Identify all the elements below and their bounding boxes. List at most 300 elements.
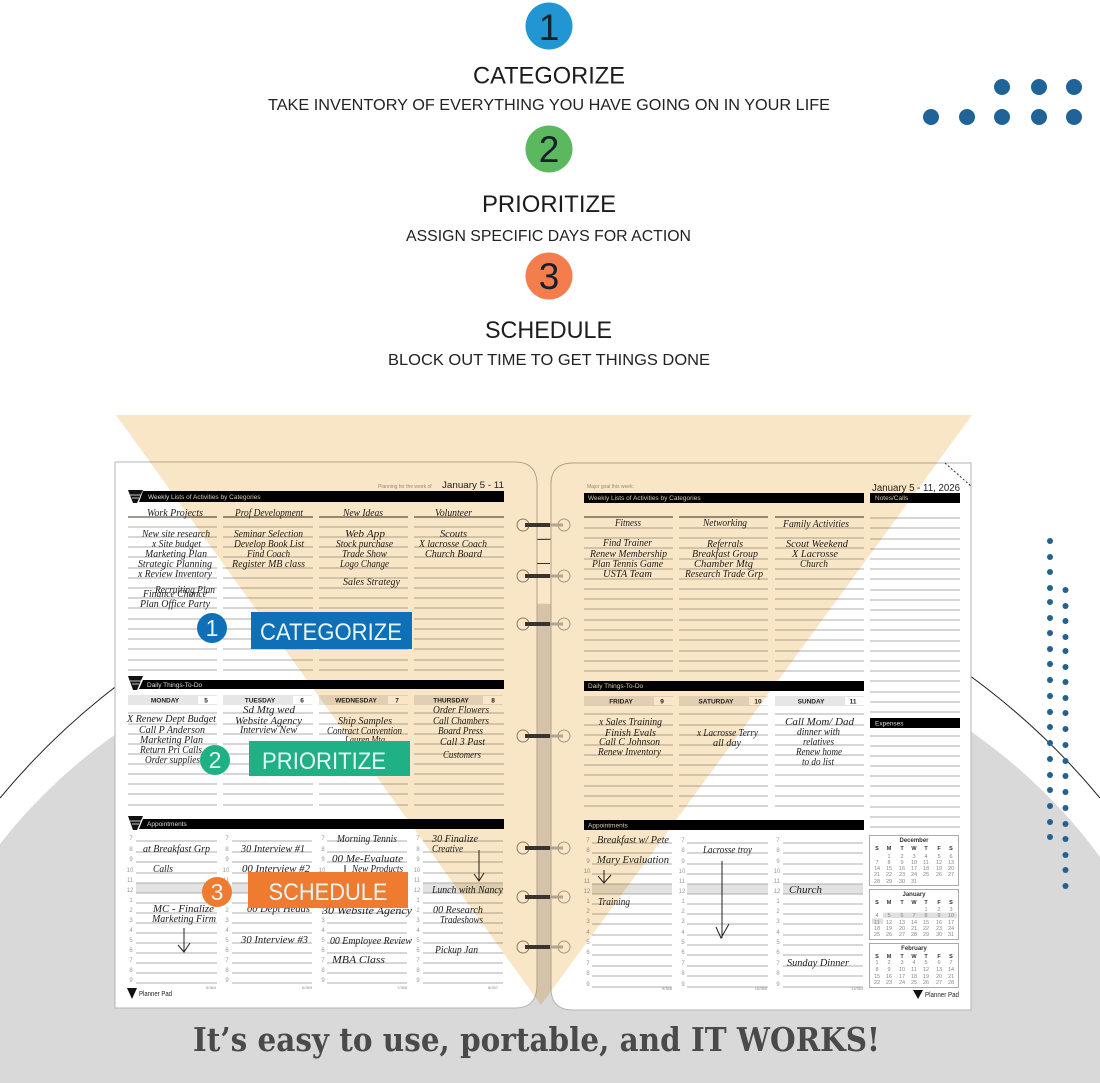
handwritten appointments right: Mary Evaluation <box>596 855 669 866</box>
calendar: december <box>870 836 958 886</box>
appointment hour labels right: 8 <box>776 971 780 977</box>
decorative dots top right <box>923 79 1082 125</box>
calendar: december: 26 <box>936 872 942 878</box>
calendar: december: 23 <box>899 872 905 878</box>
logo: planner pad right: Planner Pad <box>925 992 959 999</box>
calendar: december: 14 <box>874 866 880 872</box>
calendar: december: 16 <box>899 866 905 872</box>
appointment hour labels left: 8 <box>129 847 133 853</box>
label: prioritize: PRIORITIZE <box>262 748 386 775</box>
logo: planner pad left: Planner Pad <box>139 991 172 998</box>
appointment hour labels left: 8 <box>129 968 133 974</box>
appointment hour labels right: 12 <box>679 889 686 895</box>
left header: planning week <box>378 480 504 491</box>
handwritten weekly categories left: Trade Show <box>342 549 387 560</box>
handwritten weekly categories left: Scouts <box>440 529 467 540</box>
handwritten appointments left: 30 Finalize <box>431 834 478 845</box>
calendar: january: 8 <box>924 913 928 919</box>
appointment hour labels right: 8 <box>681 971 685 977</box>
handwritten weekly categories right: USTA Team <box>603 569 652 580</box>
calendar: december: 25 <box>923 872 929 878</box>
daily ruled lines left <box>128 713 504 805</box>
appointment hour labels right: 7 <box>681 838 685 844</box>
section bar: appointments: Appointments <box>147 821 187 828</box>
handwritten weekly categories left: Volunteer <box>435 508 473 519</box>
handwritten appointments left: MBA Class <box>331 955 385 966</box>
appointment hour labels left: 3 <box>321 918 325 924</box>
calendar: january: 1 <box>924 907 928 913</box>
handwritten daily tasks right: Renew home <box>795 747 842 758</box>
calendar: february: 7 <box>949 960 953 966</box>
handwritten appointments left: 30 Interview #3 <box>240 935 308 946</box>
handwritten weekly categories right: Referrals <box>706 539 743 550</box>
right header: major goal: Major goal this week: <box>587 484 634 490</box>
calendar: january <box>870 890 958 940</box>
day headers right: FRIDAY <box>609 698 633 706</box>
icon: number 3 badge: 3 <box>539 256 559 297</box>
calendar: december: 31 <box>911 879 917 885</box>
appointment hour labels right: 3 <box>586 919 590 925</box>
appointment hour labels right: 1 <box>776 899 780 905</box>
appointment hour labels left: 3 <box>129 918 133 924</box>
appointment hour labels left: 5 <box>416 938 420 944</box>
handwritten weekly categories left: Finance Chance <box>142 589 207 600</box>
handwritten appointments right: Breakfast w/ Pete <box>597 835 669 846</box>
calendar: december: 8 <box>887 860 891 866</box>
calendar: january: 26 <box>886 932 892 938</box>
appointment hour labels right: 3 <box>681 919 685 925</box>
calendar: february: 9 <box>887 967 891 973</box>
calendar: january: T <box>924 900 928 906</box>
calendar: january: 31 <box>948 932 954 938</box>
calendar: february <box>870 944 958 988</box>
calendar: december: December <box>899 838 929 844</box>
appointment hour labels right: 8 <box>586 848 590 854</box>
appointment hour labels right: 5 <box>776 940 780 946</box>
calendar: february: S <box>949 954 953 960</box>
handwritten weekly categories left: Develop Book List <box>233 539 305 550</box>
appointment hour labels left: 1 <box>321 898 325 904</box>
calendar: february: 12 <box>923 967 929 973</box>
calendar: december: S <box>875 846 879 852</box>
handwritten appointments left: Lunch with Nancy <box>431 885 503 896</box>
calendar: december: M <box>887 846 892 852</box>
handwritten appointments left: 30 Interview #1 <box>240 844 305 855</box>
calendar: december: 22 <box>886 872 892 878</box>
appointment lines left <box>136 841 503 983</box>
step 1: categorize <box>268 2 830 114</box>
section bar: weekly lists right <box>584 493 864 503</box>
appointment hour labels left: 9 <box>225 978 229 984</box>
calendar: february: T <box>924 954 928 960</box>
handwritten daily tasks right: Renew Inventory <box>597 747 661 758</box>
calendar: january: 15 <box>923 920 929 926</box>
calendar: february: 22 <box>874 980 880 986</box>
section bar: expenses: Expenses <box>875 720 904 728</box>
calendar: february: 20 <box>936 974 942 980</box>
callout: prioritize <box>200 741 410 776</box>
appointment hour labels right: 7 <box>681 961 685 967</box>
appointment hour labels right: 9 <box>681 859 685 865</box>
appointment hour labels left: 3 <box>416 918 420 924</box>
calendar: december: 15 <box>886 866 892 872</box>
binder rings <box>517 519 570 953</box>
handwritten weekly categories right: Family Activities <box>782 519 849 530</box>
appointment hour labels left: 5 <box>129 938 133 944</box>
appointment hour labels left: 7 <box>416 836 420 842</box>
day headers left: 8 <box>491 698 495 704</box>
appointment hour labels left: 7 <box>416 958 420 964</box>
calendar: january: S <box>949 900 953 906</box>
calendar: february: S <box>875 954 879 960</box>
calendar: february: February <box>901 946 927 952</box>
day headers right: SATURDAY <box>698 698 734 706</box>
calendar: december: 13 <box>948 860 954 866</box>
handwritten daily tasks left <box>126 705 489 766</box>
calendar: february: 6 <box>937 960 941 966</box>
page numbers left: 5/360 <box>206 985 217 990</box>
calendar: february: M <box>887 954 892 960</box>
appointment hour labels right: 4 <box>776 930 780 936</box>
appointment hour labels right: 8 <box>776 848 780 854</box>
calendar: january: W <box>911 900 917 906</box>
appointment hour labels left: 4 <box>416 928 420 934</box>
day headers left: 7 <box>395 698 399 704</box>
appointment hour labels right: 7 <box>586 838 590 844</box>
appointment hour labels right: 9 <box>776 982 780 988</box>
appointment hour labels left: 7 <box>225 836 229 842</box>
appointment hour labels right: 10 <box>679 869 686 875</box>
label: prioritize <box>249 741 410 776</box>
handwritten daily tasks left: Contract Convention <box>327 726 402 737</box>
calendar: january: 6 <box>900 913 904 919</box>
handwritten weekly categories left: x Site budget <box>151 539 202 550</box>
appointment hour labels left: 11 <box>319 878 326 884</box>
calendar: january: 23 <box>936 926 942 932</box>
appointment hour labels left: 2 <box>321 908 325 914</box>
appointment hour labels left: 4 <box>225 928 229 934</box>
appointment hour labels left: 4 <box>129 928 133 934</box>
logo: planner pad left <box>127 988 172 999</box>
calendar: december: S <box>949 846 953 852</box>
page numbers left: 6/359 <box>302 985 313 990</box>
day headers right: 9 <box>660 698 664 706</box>
appointment hour labels left: 6 <box>225 948 229 954</box>
appointment hour labels right: 9 <box>681 982 685 988</box>
calendar: january: 2 <box>937 907 941 913</box>
appointment hour labels left: 6 <box>321 948 325 954</box>
page numbers right: 11/354 <box>851 986 864 991</box>
day headers right: 10 <box>754 698 762 706</box>
icon: number 2 badge <box>526 126 572 172</box>
handwritten weekly categories left: X lacrosse Coach <box>418 539 487 550</box>
calendar: january: 30 <box>936 932 942 938</box>
appointment hour labels right: 11 <box>584 879 591 885</box>
section bar: expenses <box>870 718 960 728</box>
appointment hour labels right: 4 <box>681 930 685 936</box>
ring: 6 <box>517 891 570 903</box>
appointment lines right <box>592 843 863 987</box>
appointment hour labels left <box>127 836 421 984</box>
calendar: january: S <box>875 900 879 906</box>
handwritten appointments left: Morning Tennis <box>336 834 397 845</box>
appointment hour labels left: 2 <box>416 908 420 914</box>
calendar: december: 1 <box>887 854 891 860</box>
appointment hour labels right: 11 <box>679 879 686 885</box>
appointment hour labels right: 8 <box>681 848 685 854</box>
handwritten appointments left: New Products <box>351 864 403 875</box>
calendar: january: 16 <box>936 920 942 926</box>
calendar: december: 3 <box>912 854 916 860</box>
icon: number 3 badge <box>526 252 572 300</box>
calendar: february: 13 <box>936 967 942 973</box>
handwritten weekly categories right: Research Trade Grp <box>684 569 763 580</box>
appointment hour labels left: 7 <box>321 836 325 842</box>
step 3: schedule <box>388 252 710 369</box>
handwritten daily tasks left: Interview New <box>239 725 297 736</box>
calendar: january: 9 <box>937 913 941 919</box>
calendar: december: T <box>900 846 904 852</box>
handwritten weekly categories right <box>589 518 849 580</box>
handwritten appointments left: 00 Research <box>433 905 483 916</box>
calendar: february: 27 <box>936 980 942 986</box>
calendar: february: 8 <box>875 967 879 973</box>
calendar: december: 21 <box>874 872 880 878</box>
handwritten weekly categories left: Find Coach <box>246 549 290 560</box>
handwritten weekly categories right: Fitness <box>614 518 641 529</box>
handwritten appointments left: Marketing Firm <box>151 914 216 925</box>
handwritten daily tasks left: Customers <box>443 750 481 761</box>
handwritten weekly categories left: Work Projects <box>147 508 203 519</box>
calendar: february: 17 <box>899 974 905 980</box>
calendar: january: 11 <box>874 920 880 926</box>
calendar: february: 4 <box>912 960 916 966</box>
arrow: lacrosse trip duration <box>716 861 729 938</box>
badge: 2 <box>200 745 230 775</box>
right page sheet <box>551 463 971 1010</box>
section bar: daily things to do right <box>584 681 864 691</box>
day headers left: WEDNESDAY <box>335 698 377 704</box>
calendar: february: F <box>937 954 941 960</box>
lunch hour shading right <box>592 884 863 894</box>
appointment hour labels right: 7 <box>776 838 780 844</box>
appointment hour labels left: 9 <box>321 978 325 984</box>
appointment hour labels right: 5 <box>681 940 685 946</box>
handwritten weekly categories left: Stock purchase <box>336 539 393 550</box>
appointment hour labels left: 1 <box>225 898 229 904</box>
handwritten weekly categories right: Renew Membership <box>589 549 667 560</box>
appointment hour labels right: 6 <box>681 950 685 956</box>
appointment hour labels right: 12 <box>774 889 781 895</box>
appointment hour labels left: 8 <box>416 968 420 974</box>
calendar: january: 13 <box>899 920 905 926</box>
handwritten weekly categories left: Sales Strategy <box>343 577 400 588</box>
calendar: february: 5 <box>924 960 928 966</box>
calendar: december: F <box>937 846 941 852</box>
handwritten appointments right: Training <box>598 897 630 908</box>
right header: week date: January 5 - 11, 2026 <box>872 483 960 494</box>
calendar: december: 10 <box>911 860 917 866</box>
handwritten appointments left: at Breakfast Grp <box>143 844 210 855</box>
handwritten weekly categories left: Plan Office Party <box>139 599 210 610</box>
ring: 4 <box>517 730 570 742</box>
calendar: january: January <box>902 892 926 898</box>
handwritten daily tasks left: Marketing Plan <box>139 735 203 746</box>
lunch hour shading left <box>136 883 503 893</box>
handwritten weekly categories left: x Review Inventory <box>137 569 212 580</box>
calendar: february: W <box>911 954 917 960</box>
handwritten daily tasks left: X Renew Dept Budget <box>126 714 217 725</box>
calendar: december: 11 <box>923 860 929 866</box>
appointment hour labels left: 10 <box>319 868 326 874</box>
badge: 2: 2 <box>209 747 221 773</box>
appointment hour labels right: 8 <box>586 971 590 977</box>
appointment hour labels left: 11 <box>127 878 134 884</box>
page numbers left: 8/357 <box>488 985 499 990</box>
label: categorize: CATEGORIZE <box>260 619 402 646</box>
calendar: january: 14 <box>911 920 917 926</box>
handwritten weekly categories left: Prof Development <box>234 508 304 519</box>
day headers left: 5 <box>204 698 208 704</box>
label: categorize <box>251 612 412 649</box>
handwritten weekly categories right: Church <box>800 559 828 570</box>
section bar: weekly lists right: Weekly Lists of Activities by Categories <box>588 495 701 502</box>
calendar: february: 14 <box>948 967 954 973</box>
handwritten daily tasks right: all day <box>713 738 741 749</box>
badge: 1: 1 <box>206 615 218 641</box>
appointment hour labels left: 6 <box>129 948 133 954</box>
appointment hour labels right: 2 <box>776 909 780 915</box>
handwritten appointments right <box>596 835 850 969</box>
planner left page <box>115 462 537 1008</box>
section bar: appointments right <box>584 820 864 830</box>
badge: 3: 3 <box>211 879 223 905</box>
section bar: daily things to do <box>128 676 504 690</box>
calendar: december: 20 <box>948 866 954 872</box>
appointment hour labels left: 2 <box>225 908 229 914</box>
calendar: january: 25 <box>874 932 880 938</box>
handwritten weekly categories right: Networking <box>702 518 747 529</box>
calendar: january: 12 <box>886 920 892 926</box>
appointment hour labels left: 7 <box>225 958 229 964</box>
mini calendars <box>870 836 958 988</box>
tagline: It’s easy to use, portable, and IT WORKS! <box>193 1020 880 1059</box>
appointment hour labels left: 10 <box>127 868 134 874</box>
appointment hour labels left: 7 <box>129 958 133 964</box>
label: schedule <box>248 872 408 908</box>
appointment hour labels left: 9 <box>416 978 420 984</box>
calendar: january: 3 <box>949 907 953 913</box>
daily ruled lines right <box>584 714 864 806</box>
handwritten daily tasks left: Ship Samples <box>338 716 392 727</box>
handwritten weekly categories right: Scout Weekend <box>786 539 849 550</box>
appointment hour labels left: 12 <box>127 888 134 894</box>
badge: 1 <box>197 613 227 643</box>
calendar: december: 17 <box>911 866 917 872</box>
handwritten appointments right: Lacrosse troy <box>702 845 752 856</box>
handwritten weekly categories left: Marketing Plan <box>144 549 207 560</box>
appointment hour labels right: 9 <box>586 982 590 988</box>
calendar: january: 5 <box>887 913 891 919</box>
section bar: weekly lists <box>128 490 504 503</box>
day headers right: SUNDAY <box>798 698 825 706</box>
handwritten weekly categories right: Find Trainer <box>602 538 653 549</box>
appointment hour labels right: 3 <box>776 919 780 925</box>
appointment hour labels left: 9 <box>416 857 420 863</box>
ring: 5 <box>517 842 570 854</box>
calendar: december: 18 <box>923 866 929 872</box>
handwritten appointments left: Calls <box>153 864 173 875</box>
calendar: february: 28 <box>948 980 954 986</box>
handwritten daily tasks right: Call C Johnson <box>599 737 660 748</box>
calendar: december: T <box>924 846 928 852</box>
label: schedule: SCHEDULE <box>268 879 388 906</box>
handwritten daily tasks left: Call 3 Past <box>440 737 486 748</box>
calendar: february: 26 <box>923 980 929 986</box>
appointment hour labels right: 6 <box>776 950 780 956</box>
calendar: january: 10 <box>948 913 954 919</box>
background thin arc line <box>0 539 1100 798</box>
handwritten weekly categories left: Register MB class <box>231 559 305 570</box>
heading: prioritize: PRIORITIZE <box>482 191 616 218</box>
handwritten weekly categories left: Web App <box>345 529 385 540</box>
day headers right: 11 <box>850 698 857 706</box>
handwritten weekly categories right: Plan Tennis Game <box>591 559 663 570</box>
handwritten appointments left: Creative <box>432 844 463 855</box>
handwritten appointments left: Pickup Jan <box>434 945 478 956</box>
calendar: december: 4 <box>924 854 928 860</box>
handwritten daily tasks left: Website Agency <box>235 716 302 727</box>
appointment hour labels left: 3 <box>225 918 229 924</box>
day headers left: THURSDAY <box>433 698 469 704</box>
section bar: notes and calls: Notes/Calls <box>875 495 909 502</box>
handwritten daily tasks left: Call P Anderson <box>139 725 205 736</box>
expenses ruled lines <box>870 736 960 827</box>
handwritten daily tasks right <box>597 717 855 768</box>
ring: 1 <box>517 519 570 531</box>
handwritten weekly categories right: Breakfast Group <box>692 549 758 560</box>
notes ruled lines <box>870 518 960 712</box>
calendar: february: 23 <box>886 980 892 986</box>
arrow: marketing firm duration <box>178 865 345 952</box>
calendar: february: 18 <box>911 974 917 980</box>
ring: 7 <box>517 941 570 953</box>
calendar: december: 7 <box>875 860 879 866</box>
handwritten appointments left: 00 Me-Evaluate <box>332 854 403 865</box>
calendar: february: 21 <box>948 974 954 980</box>
calendar: february: 25 <box>911 980 917 986</box>
handwritten weekly categories left: New site research <box>141 529 210 540</box>
appointment hour labels left: 7 <box>321 958 325 964</box>
handwritten daily tasks right: x Lacrosse Terry <box>696 728 758 739</box>
appointment hour labels left: 12 <box>223 888 230 894</box>
icon: number 1 badge: 1 <box>539 7 559 48</box>
appointment hour labels left: 12 <box>414 888 421 894</box>
appointment hour labels left: 8 <box>225 968 229 974</box>
appointment hour labels left: 10 <box>414 868 421 874</box>
corner dashed cut line <box>945 463 972 487</box>
appointment hour labels left: 9 <box>321 857 325 863</box>
appointment hour labels left: 10 <box>223 868 230 874</box>
page numbers right <box>662 986 864 991</box>
day headers right <box>584 696 864 706</box>
calendar: january: 24 <box>948 926 954 932</box>
section bar: appointments <box>128 816 504 830</box>
handwritten daily tasks left: Board Press <box>438 726 483 737</box>
icon: number 1 badge <box>526 2 572 50</box>
decorative dots right side <box>1047 538 1068 889</box>
handwritten weekly categories right: X Lacrosse <box>791 549 838 560</box>
